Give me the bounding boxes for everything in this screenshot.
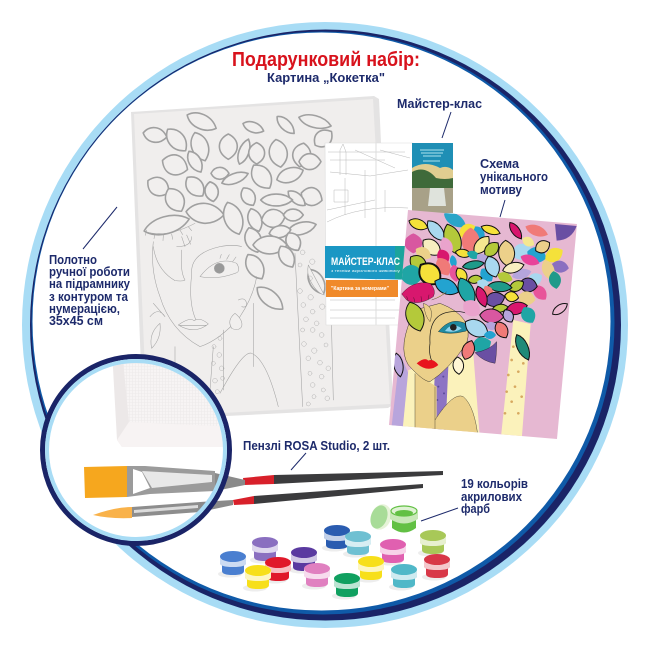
flat brush ferrule <box>215 473 245 491</box>
sheet background trunks <box>392 354 408 426</box>
colored hair leaves <box>392 209 577 378</box>
canvas line art <box>142 108 337 407</box>
booklet heading text: МАЙСТЕР-КЛАС <box>331 255 400 268</box>
round brush handle <box>254 484 423 504</box>
panel: master class booklet <box>325 143 453 325</box>
label: canvas: нумерацією, <box>49 302 120 316</box>
subtitle: Картина „Кокетка" <box>267 70 385 85</box>
paint jars <box>218 501 450 600</box>
arrow: paints label <box>421 508 458 521</box>
label: canvas: 35х45 см <box>49 314 103 328</box>
brush: flat <box>84 466 443 498</box>
lips <box>178 319 208 330</box>
eye <box>200 254 239 278</box>
label: canvas: ручної роботи <box>49 265 130 279</box>
booklet title band <box>325 246 420 280</box>
label: canvas: з контуром та <box>49 290 129 304</box>
closed jars <box>322 525 350 552</box>
arrow: brushes label <box>291 453 306 470</box>
eye <box>438 321 468 333</box>
label: canvas: на підрамнику <box>49 277 130 291</box>
lips <box>417 359 438 369</box>
label: paints: фарб <box>461 502 490 516</box>
label: canvas: Полотно <box>49 253 97 267</box>
booklet orange band <box>326 280 398 297</box>
label: master class: Майстер-клас <box>397 97 482 111</box>
label: brushes: Пензлі ROSA Studio, 2 шт. <box>243 439 390 453</box>
round brush red band <box>233 496 254 505</box>
booklet orange band text: "Картина за номерами" <box>331 286 390 292</box>
round brush ferrule <box>200 500 233 512</box>
label: canvas <box>49 253 130 328</box>
panel: colored motif sheet <box>389 209 577 440</box>
open green jar <box>367 501 418 533</box>
flat brush bristles <box>84 466 127 498</box>
booklet subheading text: з техніки акрилового живопису <box>331 268 400 273</box>
magnifier ring <box>42 356 230 544</box>
magnifier lens background <box>49 363 223 537</box>
label: paints: акрилових <box>461 490 522 504</box>
label: paints <box>461 477 528 516</box>
arrow: canvas label <box>83 207 117 249</box>
round brush bristles <box>93 507 132 518</box>
label: motif scheme: мотиву <box>480 183 522 197</box>
label: motif scheme: Схема <box>480 157 520 171</box>
sheet dots <box>504 335 526 415</box>
panel: outlined canvas <box>131 96 393 420</box>
booklet cover <box>412 143 453 213</box>
magenta hair band <box>402 283 434 303</box>
hair band hatch <box>145 223 195 247</box>
neck and trunks <box>210 253 333 407</box>
face <box>404 303 468 382</box>
label: paints: 19 кольорів <box>461 477 528 491</box>
label: motif scheme <box>480 157 548 197</box>
neck and shoulder <box>415 374 437 429</box>
flat brush red band <box>243 475 274 485</box>
ear and earring <box>230 299 247 330</box>
flat brush handle <box>274 471 443 484</box>
canvas corner close-up <box>113 363 223 447</box>
label: motif scheme: унікального <box>480 170 548 184</box>
booklet white sheet <box>325 143 413 325</box>
hair leaves outlines <box>142 108 337 315</box>
brush: round <box>93 484 423 518</box>
title: Подарунковий набір: <box>232 49 420 71</box>
arrow: master class label <box>442 112 451 138</box>
face outline <box>152 242 257 390</box>
arrow: motif scheme label <box>500 200 505 217</box>
booklet line art <box>327 143 410 325</box>
